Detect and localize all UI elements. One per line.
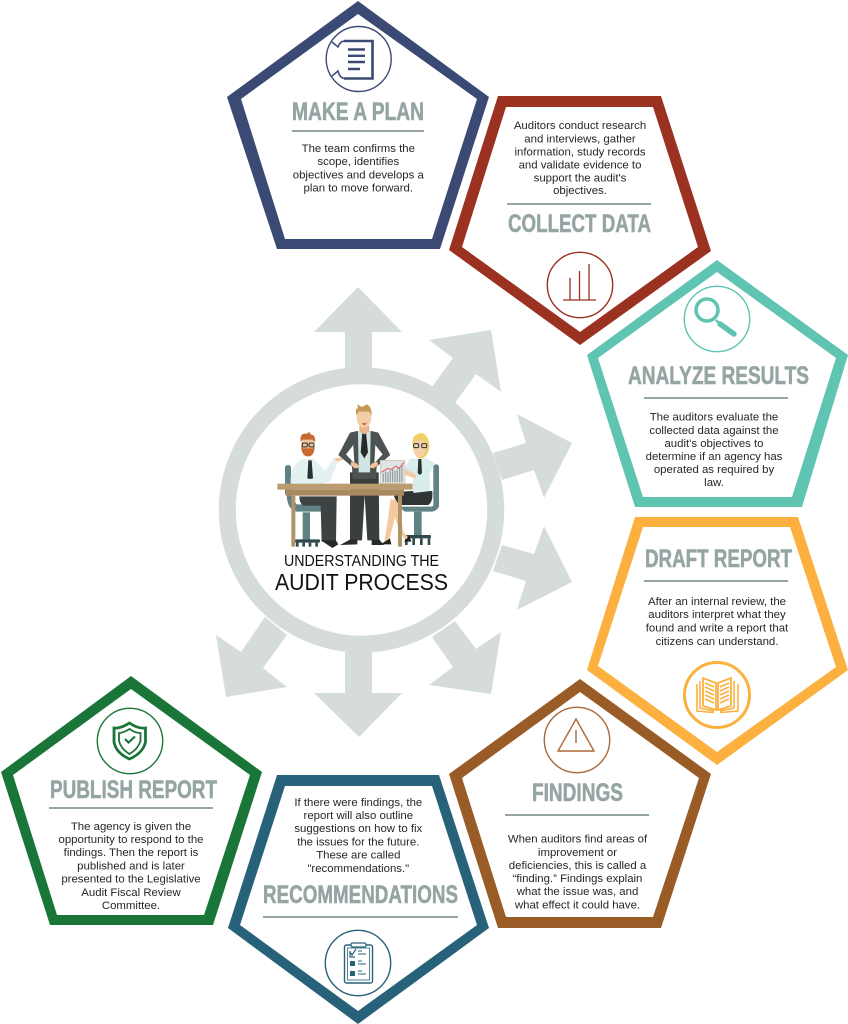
- body text: report will also outline: [304, 810, 413, 822]
- body text: what the issue was, and: [516, 886, 638, 898]
- body text: [646, 412, 783, 489]
- body text: The team confirms the: [302, 143, 415, 155]
- heading: FINDINGS: [532, 779, 623, 807]
- arrow: right upper: [493, 414, 572, 498]
- body text: The agency is given the: [71, 821, 191, 833]
- body text: presented to the Legislative: [61, 874, 201, 886]
- body text: “finding.” Findings explain: [513, 873, 642, 885]
- heading: PUBLISH REPORT: [50, 776, 217, 804]
- body text: These are called: [316, 850, 400, 862]
- left chair: [285, 465, 323, 547]
- panel: analyze results: [587, 260, 848, 507]
- body text: [514, 120, 646, 197]
- heading: COLLECT DATA: [508, 210, 651, 238]
- body text: citizens can understand.: [656, 636, 778, 648]
- title: UNDERSTANDING THE: [284, 553, 439, 570]
- heading: MAKE A PLAN: [292, 98, 424, 126]
- icon: clipboard: [325, 930, 391, 996]
- pentagon frame: [587, 517, 848, 765]
- title: [275, 553, 448, 595]
- arrow: lower right: [429, 621, 501, 694]
- right chair: [402, 464, 439, 545]
- panel: make a plan: [227, 1, 489, 249]
- icon: shield with check: [97, 708, 163, 774]
- body text: Audit Fiscal Review: [81, 887, 181, 899]
- heading: RECOMMENDATIONS: [263, 881, 458, 909]
- body text: support the audit's: [534, 172, 627, 184]
- icon: magnifying glass: [684, 286, 750, 352]
- body text: published and is later: [77, 860, 185, 872]
- body text: [646, 596, 789, 648]
- body text: opportunity to respond to the: [58, 834, 204, 846]
- body text: auditors interpret what they: [648, 609, 786, 621]
- body text: Auditors conduct research: [514, 120, 646, 132]
- illustration: auditors at a table: [277, 404, 439, 548]
- pentagon frame: [587, 260, 848, 507]
- body text: [293, 143, 424, 194]
- body text: suggestions on how to fix: [294, 823, 423, 835]
- arrow: lower left: [216, 617, 287, 697]
- heading: DRAFT REPORT: [645, 545, 792, 573]
- panel: recommendations: [228, 775, 489, 1024]
- arrow: up: [314, 287, 402, 372]
- pentagon frame: [449, 679, 711, 928]
- panel: publish report: [1, 676, 262, 925]
- icon: bar chart: [547, 252, 613, 318]
- body text: operated as required by: [654, 464, 774, 476]
- arrow: right lower: [493, 526, 572, 610]
- title: AUDIT PROCESS: [275, 569, 448, 595]
- pentagon frame: [227, 1, 489, 249]
- icon: plan document: [326, 26, 391, 92]
- body text: objectives.: [553, 185, 607, 197]
- body text: plan to move forward.: [304, 182, 413, 194]
- panel: findings: [449, 679, 711, 928]
- panel: collect data: [449, 96, 711, 345]
- body text: deficiencies, this is called a: [509, 860, 647, 872]
- center man: [338, 404, 390, 545]
- body text: what effect it could have.: [514, 900, 640, 912]
- body text: improvement or: [538, 847, 617, 859]
- body text: Committee.: [102, 900, 160, 912]
- body text: found and write a report that: [646, 622, 789, 634]
- central hub with arrows: [216, 287, 572, 737]
- laptop chart: [380, 460, 405, 484]
- body text: After an internal review, the: [648, 596, 786, 608]
- body text: and interviews, gather: [524, 133, 636, 145]
- ring: [227, 376, 496, 644]
- pentagon frame: [1, 676, 262, 925]
- body text: "recommendations.": [307, 863, 409, 875]
- body text: collected data against the: [649, 425, 779, 437]
- arrow: upper right: [429, 330, 501, 403]
- pentagon frame: [228, 775, 489, 1024]
- woman: [381, 433, 435, 544]
- body text: scope, identifies: [317, 156, 399, 168]
- icon: open book: [684, 662, 750, 728]
- pentagon frame: [449, 96, 711, 345]
- body text: determine if an agency has: [646, 451, 783, 463]
- body text: If there were findings, the: [294, 797, 422, 809]
- table: [277, 484, 413, 547]
- panel: draft report: [587, 517, 848, 765]
- body text: findings. Then the report is: [64, 847, 199, 859]
- body text: information, study records: [514, 146, 646, 158]
- body text: and validate evidence to: [519, 159, 641, 171]
- body text: objectives and develops a: [293, 170, 424, 182]
- left man: [291, 432, 344, 548]
- icon: warning triangle: [544, 707, 610, 773]
- body text: The auditors evaluate the: [650, 412, 778, 424]
- body text: the issues for the future.: [297, 836, 419, 848]
- body text: [294, 797, 423, 875]
- body text: [508, 834, 648, 912]
- body text: When auditors find areas of: [508, 834, 648, 846]
- body text: audit's objectives to: [664, 438, 764, 450]
- body text: law.: [704, 477, 724, 489]
- arrow: down: [314, 652, 402, 737]
- body text: [58, 821, 204, 912]
